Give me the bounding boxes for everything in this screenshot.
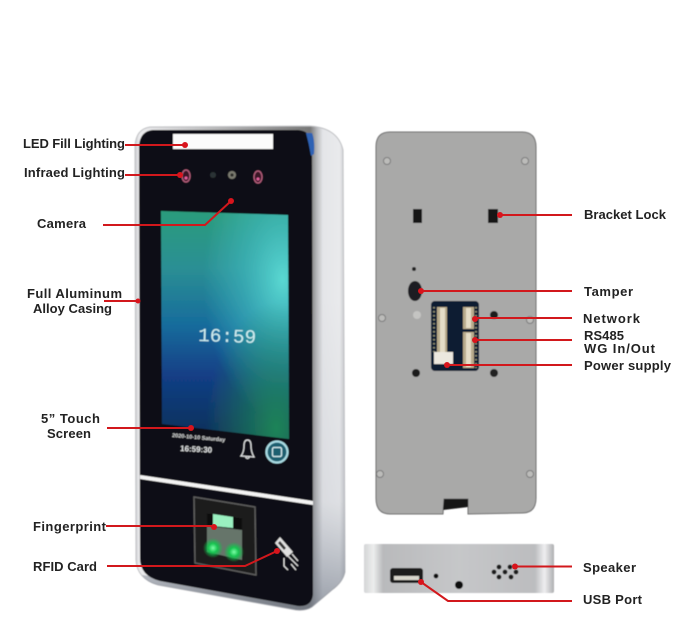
callout: aluminum casing	[27, 286, 140, 316]
callout: touch screen	[41, 411, 194, 441]
back panel	[376, 132, 536, 514]
callouts left	[23, 136, 280, 574]
callout: aluminum casing: Alloy Casing	[33, 301, 112, 316]
callout: network: Network	[583, 311, 641, 326]
tamper switch	[408, 281, 422, 301]
callout: USB port: USB Port	[583, 592, 643, 607]
callout: fingerprint: Fingerprint	[33, 519, 107, 534]
callout: RS485 and WG: WG In/Out	[584, 341, 656, 356]
icon: RFID card and hand	[275, 537, 298, 570]
status bar time: 16:59:30	[180, 444, 213, 455]
holes	[434, 574, 463, 589]
speaker grille	[492, 565, 518, 579]
bottom notch	[443, 499, 468, 510]
black front panel	[139, 130, 313, 606]
LED fill light	[173, 134, 273, 149]
icon: bell	[241, 440, 254, 458]
bracket lock holes	[413, 209, 498, 223]
unit body	[364, 544, 554, 593]
callout: USB port	[418, 579, 643, 607]
blue corner indicator	[306, 133, 314, 156]
front device	[135, 126, 345, 610]
bottom unit	[364, 544, 554, 593]
callout: tamper	[418, 284, 633, 299]
infrared lights	[182, 170, 262, 183]
camera lenses	[210, 171, 236, 179]
callout: bracket lock	[497, 207, 667, 222]
callouts right	[418, 207, 672, 607]
callout: power supply: Power supply	[584, 358, 672, 373]
small hole	[412, 267, 416, 271]
callout: speaker: Speaker	[583, 560, 636, 575]
connector board	[431, 301, 479, 371]
casing bottom shading	[142, 300, 345, 610]
touch screen	[161, 211, 289, 439]
fingerprint sensor	[194, 497, 256, 575]
callout: camera	[37, 198, 234, 231]
callout: RFID card	[33, 548, 280, 574]
callout: aluminum casing: Full Aluminum	[27, 286, 122, 301]
callout: fingerprint	[33, 519, 217, 534]
aluminum casing	[135, 126, 345, 610]
white divider stripe	[140, 475, 313, 505]
icon: round button	[266, 442, 288, 462]
callout: speaker	[512, 560, 636, 575]
callout: infrared lighting	[24, 165, 183, 180]
callout: RS485 and WG	[472, 328, 656, 356]
mounting holes and screws	[376, 158, 534, 478]
status bar date: 2020-10-10 Saturday	[172, 433, 226, 444]
USB port	[390, 568, 423, 583]
callout: LED fill lighting: LED Fill Lighting	[23, 136, 125, 151]
callout: RFID card: RFID Card	[33, 559, 97, 574]
callout: LED fill lighting	[23, 136, 188, 151]
callout: network	[472, 311, 641, 326]
callout: RS485 and WG: RS485	[584, 328, 624, 343]
callout: touch screen: Screen	[47, 426, 91, 441]
callout: bracket lock: Bracket Lock	[584, 207, 667, 222]
callout: tamper: Tamper	[584, 284, 633, 299]
callout: touch screen: 5” Touch	[41, 411, 100, 426]
callout: power supply	[444, 358, 672, 373]
callout: infrared lighting: Infraed Lighting	[24, 165, 125, 180]
metal plate	[376, 132, 536, 514]
callout: camera: Camera	[37, 216, 87, 231]
clock on screen: 16:59	[198, 325, 257, 349]
